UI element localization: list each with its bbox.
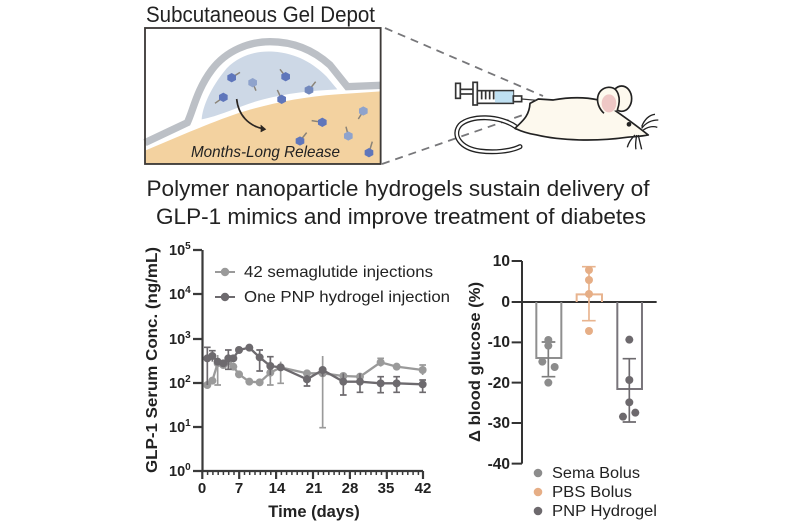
- y tick labels: 10: [169, 420, 185, 436]
- molecules: [215, 69, 373, 157]
- title: GLP-1 mimics and improve treatment of diabetes: [156, 204, 646, 229]
- y axis title: GLP-1 Serum Conc. (ng/mL): [144, 247, 161, 473]
- legend: Sema Bolus: [552, 465, 640, 482]
- y tick labels: 10: [169, 464, 185, 480]
- line chart: GLP-1 serum concentration: [144, 241, 450, 521]
- x tick labels: 28: [342, 480, 358, 497]
- title: Polymer nanoparticle hydrogels sustain delivery of: [146, 176, 650, 201]
- skin layer: [145, 42, 381, 143]
- front ear: [598, 87, 619, 113]
- y tick labels: 5: [185, 241, 191, 252]
- y tick labels: -30: [488, 415, 510, 432]
- y tick labels: 10: [493, 253, 510, 270]
- arrow: release: [237, 99, 266, 132]
- x tick labels: 35: [378, 480, 394, 497]
- x tick labels: 21: [306, 480, 322, 497]
- bar: Sema Bolus: [536, 302, 561, 387]
- series: PNP hydrogel: [203, 344, 427, 395]
- y tick labels: 10: [169, 287, 185, 303]
- eye: [627, 122, 631, 127]
- label: Months-Long Release: Months-Long Release: [191, 144, 340, 161]
- x tick labels: 14: [269, 480, 286, 497]
- tail: [457, 118, 520, 152]
- body: [515, 98, 648, 140]
- y tick labels: 4: [185, 285, 191, 296]
- y tick labels: -40: [488, 456, 510, 473]
- x tick labels: 7: [235, 480, 243, 497]
- back ear: [612, 86, 632, 111]
- y tick labels: [169, 241, 191, 480]
- y tick labels: 3: [185, 330, 191, 341]
- axes: [512, 261, 657, 464]
- legend: 42 semaglutide injections: [244, 264, 433, 281]
- y tick labels: [488, 253, 510, 473]
- y tick labels: 2: [185, 374, 191, 385]
- tissue layer: [145, 91, 381, 164]
- gel depot: [202, 52, 337, 119]
- y tick labels: -10: [488, 334, 510, 351]
- axes: [193, 250, 423, 479]
- bar chart: change in blood glucose: [467, 253, 657, 520]
- series: semaglutide: [203, 355, 427, 428]
- legend: [215, 264, 450, 306]
- y tick labels: 0: [501, 294, 510, 311]
- legend: [534, 465, 657, 520]
- panel: gel depot illustration: [145, 28, 381, 164]
- y tick labels: 0: [185, 462, 191, 473]
- x tick labels: 42: [415, 480, 431, 497]
- x tick labels: [198, 480, 431, 497]
- y tick labels: 1: [185, 418, 191, 429]
- legend: One PNP hydrogel injection: [244, 289, 450, 306]
- bar: PBS Bolus: [577, 266, 602, 335]
- y tick labels: 10: [169, 243, 185, 259]
- y tick labels: -20: [488, 375, 510, 392]
- y tick labels: 10: [169, 376, 185, 392]
- y tick labels: 10: [169, 332, 185, 348]
- legend: PNP Hydrogel: [552, 503, 657, 520]
- x tick labels: 0: [198, 480, 206, 497]
- y axis title: Δ blood glucose (%): [467, 282, 484, 442]
- x axis title: Time (days): [268, 503, 360, 521]
- heading: Subcutaneous Gel Depot: Subcutaneous Gel Depot: [146, 2, 375, 27]
- title: [146, 176, 650, 229]
- whiskers: [627, 114, 658, 149]
- legend: PBS Bolus: [552, 484, 632, 501]
- bar: PNP Hydrogel: [617, 302, 642, 422]
- syringe: [456, 82, 537, 105]
- dashed zoom lines: [382, 28, 543, 164]
- icon: mouse with syringe: [456, 82, 658, 152]
